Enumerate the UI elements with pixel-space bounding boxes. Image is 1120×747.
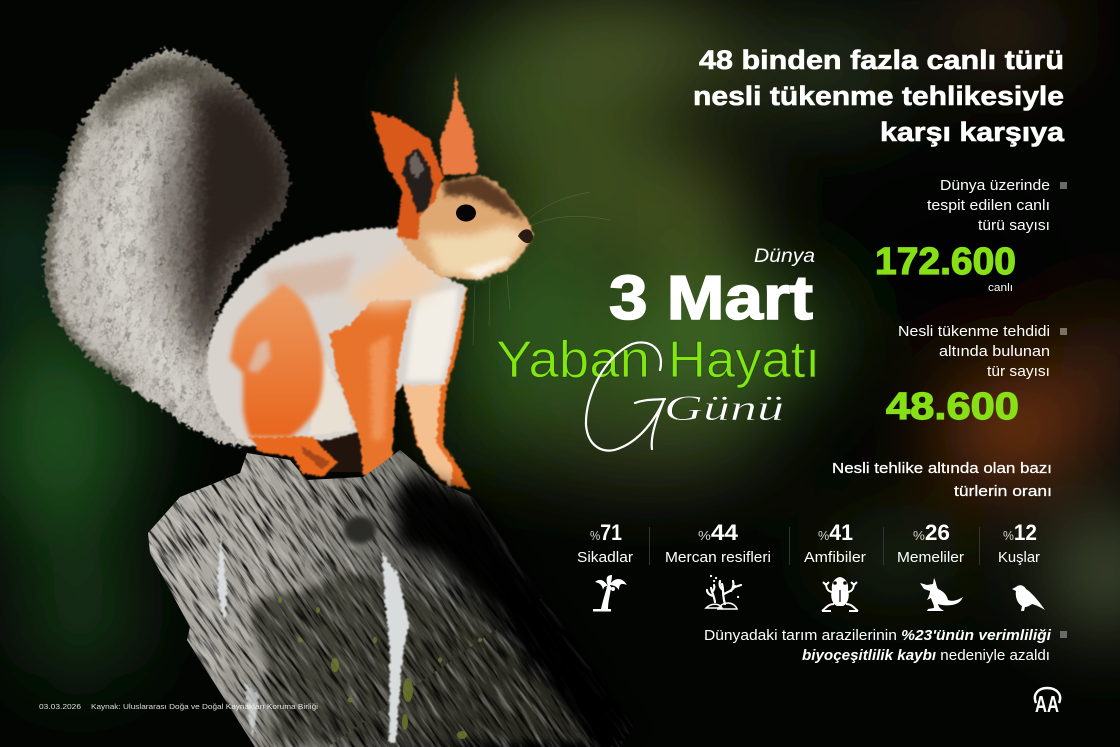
note text: biyoçeşitlilik kaybı nedeniyle azaldı bbox=[802, 647, 1050, 664]
divider bbox=[883, 527, 884, 565]
species: birds: Kuşlar bbox=[998, 550, 1040, 566]
title: Yaban Hayatı: Hayatı bbox=[668, 331, 820, 389]
stat 1 description: türü sayısı bbox=[978, 218, 1050, 234]
title: Günü script: Günü bbox=[664, 388, 784, 428]
stat: threatened species bbox=[886, 324, 1067, 428]
species section heading: Nesli tehlike altında olan bazı bbox=[832, 460, 1052, 477]
logo: AA bbox=[1035, 688, 1060, 717]
squirrel tail bbox=[30, 40, 300, 460]
title: Günü script bbox=[586, 342, 784, 451]
stat 1 value: 172.600 bbox=[875, 241, 1016, 283]
stat 2 marker bbox=[1060, 328, 1067, 335]
farmland note bbox=[704, 627, 1067, 664]
species: amphibians: %41 bbox=[818, 520, 853, 545]
title: Yaban Hayatı: Yaban bbox=[496, 331, 650, 389]
squirrel whiskers bbox=[473, 192, 610, 345]
stat 2 description: Nesli tükenme tehdidi bbox=[898, 324, 1050, 340]
icon: frog bbox=[822, 577, 858, 611]
squirrel nose bbox=[518, 229, 533, 243]
stat 2 description: altında bulunan bbox=[939, 344, 1050, 360]
icon: kangaroo bbox=[920, 578, 963, 611]
footer source: Kaynak: Uluslararası Doğa ve Doğal Kaynakları Koruma Birliği bbox=[91, 702, 318, 711]
stat: identified species bbox=[875, 178, 1067, 294]
top headline: nesli tükenme tehlikesiyle bbox=[693, 81, 1064, 111]
stump moss bbox=[278, 597, 482, 739]
icon: bird bbox=[1012, 585, 1045, 611]
stump mossy dark area bbox=[253, 573, 590, 742]
top headline: karşı karşıya bbox=[880, 117, 1065, 147]
species stats row bbox=[577, 520, 1045, 612]
species: birds: %12 bbox=[1003, 520, 1037, 545]
species section heading: türlerin oranı bbox=[954, 483, 1052, 500]
divider bbox=[789, 527, 790, 565]
icon: coral bbox=[706, 576, 741, 609]
stat 1 marker bbox=[1060, 182, 1067, 189]
squirrel far leg bbox=[403, 287, 470, 490]
divider bbox=[649, 527, 650, 565]
stat 1 unit: canlı bbox=[988, 282, 1013, 294]
tree stump bbox=[148, 450, 636, 747]
note marker bbox=[1060, 631, 1067, 638]
squirrel head bbox=[397, 175, 533, 280]
species: coral reefs: %44 bbox=[698, 520, 739, 545]
squirrel belly shadow bbox=[310, 425, 372, 472]
title: Dünya: Dünya bbox=[754, 246, 815, 267]
squirrel body bbox=[207, 228, 467, 447]
species: coral reefs bbox=[665, 520, 771, 609]
species: amphibians: Amfibiler bbox=[804, 550, 866, 566]
squirrel chest bbox=[406, 288, 458, 380]
squirrel haunch bbox=[230, 283, 323, 437]
species: amphibians bbox=[804, 520, 866, 611]
squirrel front ear bbox=[370, 110, 443, 240]
stat 2 description bbox=[898, 324, 1050, 380]
title: 3 Mart: 3 Mart bbox=[609, 264, 813, 333]
squirrel back ear bbox=[440, 72, 478, 175]
top headline: 48 binden fazla canlı türü bbox=[699, 45, 1064, 75]
stump knot bbox=[344, 516, 376, 544]
stump grain bbox=[148, 450, 633, 747]
stump white streaks bbox=[217, 533, 409, 742]
stat 2 description: tür sayısı bbox=[987, 364, 1050, 380]
note text: Dünyadaki tarım arazilerinin %23'ünün verimliliği bbox=[704, 627, 1052, 644]
species: mammals: %26 bbox=[913, 520, 950, 545]
species: cicadas bbox=[577, 520, 633, 612]
top headline bbox=[693, 45, 1065, 147]
stump shadow bbox=[395, 472, 636, 740]
icon: palm tree bbox=[593, 575, 627, 612]
stat 1 description: Dünya üzerinde bbox=[940, 178, 1050, 194]
logo: AA: AA bbox=[1035, 691, 1059, 717]
squirrel eye bbox=[456, 204, 476, 222]
species: birds bbox=[998, 520, 1045, 611]
footer source: 03.03.2026 bbox=[39, 702, 81, 711]
stat 1 description bbox=[927, 178, 1050, 234]
species: cicadas: %71 bbox=[590, 520, 622, 545]
squirrel bbox=[207, 72, 610, 497]
stat 1 description: tespit edilen canlı bbox=[927, 198, 1050, 214]
species: mammals bbox=[897, 520, 964, 611]
species: cicadas: Sikadlar bbox=[577, 550, 633, 566]
day title bbox=[496, 246, 820, 451]
species section heading bbox=[832, 460, 1052, 500]
note text bbox=[704, 627, 1052, 664]
stat 2 value: 48.600 bbox=[886, 386, 1019, 428]
stump bark bbox=[148, 450, 633, 747]
squirrel back foot bbox=[250, 437, 337, 477]
squirrel shoulder bbox=[350, 245, 445, 308]
species: mammals: Memeliler bbox=[897, 550, 964, 566]
squirrel front leg bbox=[330, 300, 412, 497]
species: coral reefs: Mercan resifleri bbox=[665, 550, 771, 566]
divider bbox=[979, 527, 980, 565]
